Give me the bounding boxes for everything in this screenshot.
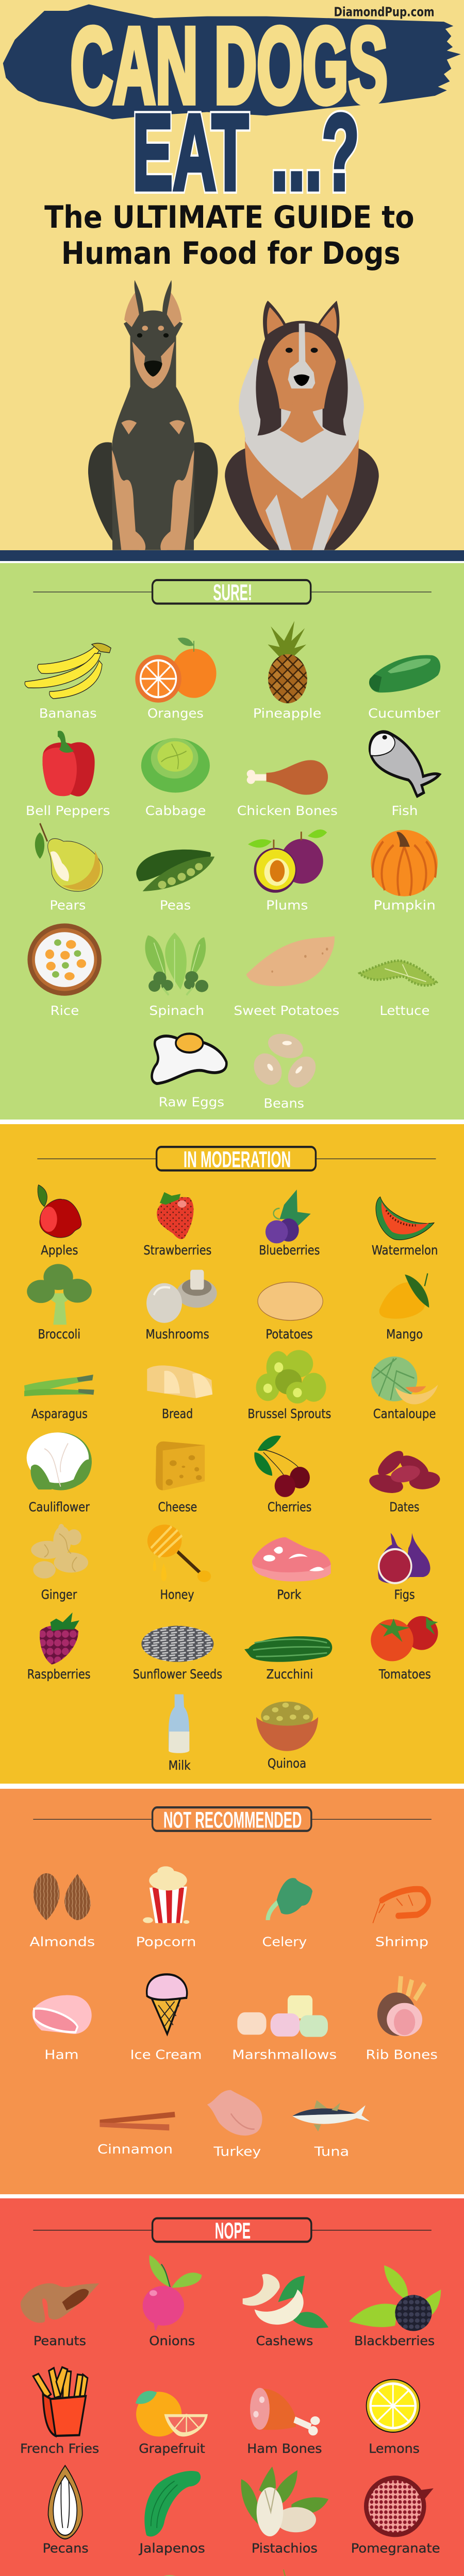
food: plums: Plums — [266, 899, 308, 913]
food: lettuce: Lettuce — [379, 1004, 429, 1018]
food: brussel sprouts: Brussel Sprouts — [247, 1406, 331, 1421]
food grid: not recommended — [29, 1807, 438, 2159]
food: shrimp: Shrimp — [375, 1935, 428, 1950]
food: zucchini — [244, 1636, 332, 1682]
food: pomegranate — [351, 2476, 440, 2556]
illustration: doberman — [88, 280, 218, 550]
title: eat: ...? — [271, 92, 359, 212]
food: cherries — [254, 1435, 311, 1515]
food: beans: Beans — [263, 1096, 304, 1111]
food: bananas: Bananas — [39, 706, 97, 721]
food: olives — [142, 2575, 209, 2576]
food: zucchini: Zucchini — [267, 1667, 313, 1682]
food: apples: Apples — [41, 1243, 78, 1258]
brush stroke banner — [3, 4, 461, 120]
food: spinach: Spinach — [149, 1004, 204, 1018]
food: watermelon — [372, 1197, 438, 1258]
food: blackberries: Blackberries — [354, 2334, 435, 2348]
food: pecans — [43, 2466, 89, 2556]
food: rice — [27, 923, 102, 1018]
food: cantaloupe — [371, 1357, 438, 1421]
illustration: collie — [225, 301, 379, 550]
food: spinach — [145, 933, 208, 1018]
food: raw eggs: Raw Eggs — [159, 1095, 224, 1110]
food: cashews — [243, 2274, 328, 2348]
food: jalapenos — [138, 2471, 205, 2556]
food: blueberries — [259, 1190, 320, 1258]
food: raspberries: Raspberries — [27, 1667, 91, 1682]
food: ham bones — [247, 2388, 322, 2456]
subtitle — [44, 199, 415, 271]
food grid: sure — [25, 580, 441, 1111]
food: potatoes: Potatoes — [266, 1327, 313, 1342]
food: bread: Bread — [162, 1406, 193, 1421]
food: dates: Dates — [389, 1500, 419, 1515]
food: pork: Pork — [277, 1588, 301, 1602]
food: peas — [136, 850, 214, 913]
food: cantaloupe: Cantaloupe — [373, 1406, 436, 1421]
food: ginger — [31, 1524, 88, 1602]
food: broccoli: Broccoli — [38, 1327, 80, 1342]
food: lemons: Lemons — [369, 2442, 420, 2456]
food: grapefruit: Grapefruit — [139, 2442, 205, 2456]
food: cucumber: Cucumber — [368, 706, 441, 721]
food: turkey: Turkey — [213, 2145, 261, 2159]
title: eat: EAT — [132, 92, 248, 212]
subtitle: Human Food for Dogs — [61, 235, 401, 271]
food: ginger: Ginger — [41, 1588, 77, 1602]
food: pork — [252, 1537, 331, 1602]
food: chicken bones: Chicken Bones — [237, 804, 338, 819]
food: turkey — [207, 2090, 262, 2159]
section heading: sure — [33, 580, 432, 605]
food: tomatoes — [371, 1616, 438, 1682]
food: dates — [368, 1446, 441, 1515]
food: cheese: Cheese — [158, 1500, 197, 1515]
food: rib bones: Rib Bones — [366, 2048, 438, 2062]
section heading: not recommended: NOT RECOMMENDED — [163, 1807, 302, 1833]
food: sweet potatoes: Sweet Potatoes — [234, 1004, 339, 1018]
food: bell peppers: Bell Peppers — [26, 804, 110, 819]
food: almonds — [29, 1873, 95, 1950]
title: eat: EAT — [132, 92, 248, 212]
subtitle: The ULTIMATE GUIDE to — [44, 199, 415, 235]
food: cinnamon — [97, 2112, 175, 2157]
food: celery: Celery — [262, 1935, 307, 1950]
food: apples — [38, 1185, 81, 1258]
food: cherries: Cherries — [268, 1500, 311, 1515]
food: bread — [147, 1365, 212, 1421]
food: chicken bones — [237, 760, 338, 819]
section heading: in moderation: IN MODERATION — [184, 1146, 291, 1172]
food: brussel sprouts — [247, 1350, 331, 1421]
food: marshmallows: Marshmallows — [232, 2048, 337, 2062]
food: ham — [32, 1995, 92, 2062]
food: cabbage: Cabbage — [145, 804, 206, 819]
food: cinnamon: Cinnamon — [97, 2142, 173, 2157]
food: mango: Mango — [386, 1327, 423, 1342]
food: marshmallows — [232, 1995, 337, 2062]
food: lettuce — [359, 961, 437, 1018]
section heading: nope — [33, 2217, 432, 2244]
food: cashews: Cashews — [256, 2334, 313, 2348]
food: cranberries — [253, 2570, 329, 2576]
food: figs: Figs — [394, 1588, 415, 1602]
food: mango — [379, 1274, 429, 1342]
food: ice cream — [130, 1974, 202, 2062]
food: lemons — [367, 2380, 420, 2456]
panel: not recommended — [0, 1789, 464, 2194]
food: broccoli — [27, 1264, 92, 1342]
navy divider bar — [0, 550, 464, 561]
food: tuna: Tuna — [313, 2145, 349, 2159]
food: tuna — [292, 2100, 370, 2159]
food: pistachios — [241, 2467, 328, 2556]
food: popcorn: Popcorn — [136, 1935, 196, 1950]
food: french fries — [20, 2367, 99, 2456]
food: quinoa — [256, 1702, 318, 1771]
food: asparagus — [24, 1375, 94, 1421]
food: fish: Fish — [391, 804, 418, 819]
section heading: nope: NOPE — [215, 2217, 251, 2244]
food: bell peppers — [26, 731, 110, 819]
food: honey — [147, 1524, 211, 1602]
food: jalapenos: Jalapenos — [138, 2541, 205, 2556]
food: peanuts: Peanuts — [34, 2334, 86, 2348]
food: peanuts — [21, 2283, 99, 2348]
food: grapefruit — [136, 2391, 208, 2456]
food: milk: Milk — [169, 1758, 191, 1773]
food: mushrooms: Mushrooms — [145, 1327, 209, 1342]
food: cucumber — [368, 655, 441, 721]
food: mushrooms — [145, 1270, 217, 1342]
food: cabbage — [141, 738, 210, 819]
food: blueberries: Blueberries — [259, 1243, 320, 1258]
food: blackberries — [349, 2265, 441, 2348]
food: watermelon: Watermelon — [372, 1243, 438, 1258]
food: raw eggs — [152, 1033, 226, 1110]
food: cauliflower — [27, 1432, 92, 1515]
food: milk — [169, 1694, 191, 1773]
food: figs — [378, 1533, 430, 1602]
panel: in moderation — [0, 1124, 464, 1784]
food: pears — [35, 823, 103, 913]
food: potatoes — [258, 1282, 323, 1342]
food: oranges: Oranges — [147, 706, 204, 721]
food: strawberries — [143, 1192, 211, 1258]
food: sweet potatoes — [234, 936, 339, 1018]
food: french fries: French Fries — [20, 2442, 99, 2456]
panel: title header — [0, 0, 464, 550]
food: pears: Pears — [49, 899, 86, 913]
food: cheese — [156, 1442, 205, 1515]
food: peas: Peas — [160, 899, 191, 913]
food: almonds: Almonds — [29, 1935, 95, 1950]
food: pumpkin: Pumpkin — [373, 899, 436, 913]
panel: nope — [0, 2198, 464, 2576]
food grid: in moderation — [24, 1146, 441, 1682]
food: ham: Ham — [44, 2048, 79, 2062]
food: rib bones — [366, 1976, 438, 2062]
food: shrimp — [373, 1889, 428, 1950]
food: asparagus: Asparagus — [31, 1406, 88, 1421]
food: fish — [370, 732, 439, 819]
panel: sure — [0, 563, 464, 1120]
title: eat: ...? — [271, 92, 359, 212]
food: sunflower seeds: Sunflower Seeds — [133, 1667, 222, 1682]
food: strawberries: Strawberries — [143, 1243, 211, 1258]
food: onions — [143, 2255, 202, 2348]
section heading: in moderation — [37, 1146, 436, 1172]
food: raspberries — [27, 1613, 91, 1682]
food: sunflower seeds — [133, 1626, 222, 1682]
food: pumpkin — [371, 830, 438, 913]
food: pineapple — [253, 621, 321, 721]
food: oranges — [135, 638, 217, 721]
food: ham bones: Ham Bones — [247, 2442, 322, 2456]
food: pomegranate: Pomegranate — [351, 2541, 440, 2556]
food: popcorn — [136, 1867, 196, 1950]
food: honey: Honey — [160, 1588, 194, 1602]
food: pineapple: Pineapple — [253, 706, 321, 721]
food: celery — [262, 1878, 312, 1950]
food: rice: Rice — [51, 1004, 79, 1018]
food: plums — [248, 829, 327, 913]
header artwork and text — [3, 4, 461, 550]
food grid: milk and quinoa — [169, 1694, 318, 1773]
food grid: nope — [20, 2217, 441, 2576]
food: bananas — [25, 643, 111, 721]
food: onions: Onions — [149, 2334, 195, 2348]
website label: DiamondPup.com — [334, 5, 435, 20]
food: cauliflower: Cauliflower — [29, 1500, 90, 1515]
food: pistachios: Pistachios — [252, 2541, 318, 2556]
food: ice cream: Ice Cream — [130, 2048, 202, 2062]
section heading: sure: SURE! — [213, 580, 252, 605]
food: beans — [249, 1030, 321, 1111]
food: tomatoes: Tomatoes — [378, 1667, 431, 1682]
section heading: not recommended — [33, 1807, 432, 1833]
food: quinoa: Quinoa — [268, 1756, 306, 1771]
food: pecans: Pecans — [43, 2541, 89, 2556]
